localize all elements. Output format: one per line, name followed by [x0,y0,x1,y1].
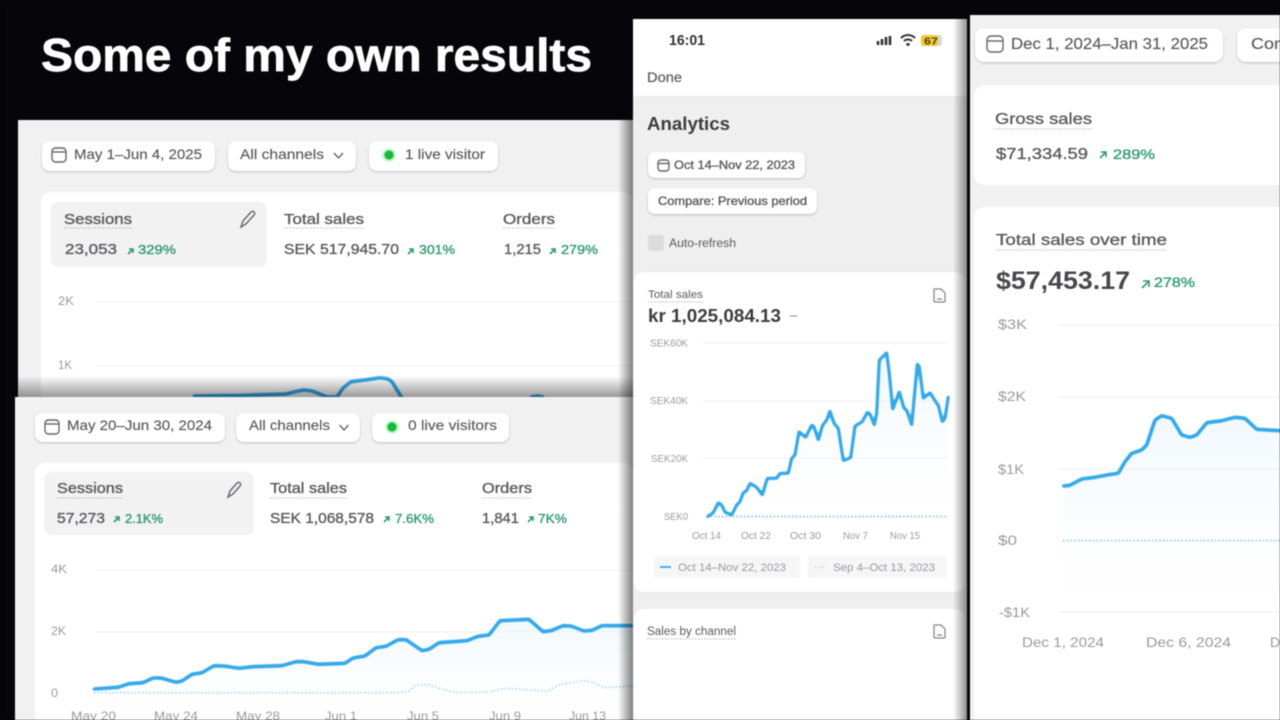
sales line chart [998,316,1280,650]
phone right edge shadow [953,19,967,720]
sessions metric [44,472,254,535]
card: total sales over time: Total sales over time [996,232,1167,249]
card: gross sales: 289% [1113,146,1155,162]
card: total sales over time [974,207,1280,720]
icon: wifi [901,35,915,45]
sessions line chart 2025 [58,294,632,398]
icon: battery [921,35,942,48]
card: total sales over time: $57,453.17 [996,267,1130,295]
card: total sales: Total sales [648,289,704,301]
total sales metric: 7.6K% [395,511,434,526]
compare chip: Compare: Previous period [658,194,807,208]
date filter chip 2024 [35,413,225,442]
sales line chart: $3K [998,316,1028,332]
sessions line chart 2024: 4K [51,562,67,576]
total sales line chart: SEK40K [650,395,688,407]
auto-refresh checkbox [648,235,736,251]
total sales metric: Total sales [270,480,347,497]
total sales metric: SEK 1,068,578 [270,510,374,527]
panel: 2024 analytics dashboard [15,397,633,720]
orders metric: 1,841 [482,510,519,527]
right edge shadow [618,397,633,720]
card: total sales over time: 278% [1154,274,1195,290]
analytics heading: Analytics [647,114,730,134]
date chip [648,152,805,178]
orders metric [503,211,598,258]
bottom edge shadow [18,376,633,398]
live visitors chip [372,413,509,442]
orders metric: Orders [482,480,532,497]
sessions metric: Sessions [64,211,132,228]
date chip: Oct 14–Nov 22, 2023 [674,158,795,172]
orders metric: Orders [503,211,555,228]
chart legend [654,556,947,578]
total sales line chart: Nov 7 [843,530,868,542]
live visitors chip: 0 live visitors [408,417,497,433]
icon: signal [878,36,890,45]
total sales metric: 301% [419,242,455,257]
panel: 2025 analytics dashboard [18,120,633,402]
live visitor chip: 1 live visitor [405,146,485,162]
compare chip, cropped [1237,28,1280,62]
card: sales by channel: Sales by channel [647,626,736,638]
total sales line chart: Oct 30 [790,530,821,542]
sessions metric: Sessions [57,480,123,497]
metrics and chart card [35,463,633,720]
sessions metric [51,202,267,267]
total sales metric: SEK 517,945.70 [284,241,399,258]
sales line chart: Dec 6, 2024 [1146,634,1231,650]
orders metric: 1,215 [504,241,541,258]
orders metric [482,480,567,527]
total sales line chart [650,338,948,542]
sessions line chart 2024 [51,562,632,720]
sessions line chart 2025: 1K [58,358,72,372]
phone status bar and header [633,19,967,96]
sessions line chart 2025: 2K [58,294,74,308]
sessions metric: 57,273 [57,510,105,527]
icon: export document [934,625,945,638]
total sales metric: Total sales [284,211,364,228]
chart legend: Sep 4–Oct 13, 2023 [833,562,935,574]
channel filter chip: All channels [249,417,330,433]
total sales metric [284,211,455,258]
total sales metric [270,480,434,527]
card: gross sales: $71,334.59 [996,146,1088,163]
total sales line chart: Oct 14 [692,530,721,542]
card: total sales [634,272,965,592]
sales line chart: D [1270,634,1280,650]
total sales line chart: SEK20K [651,453,688,465]
phone status bar and header: Done [647,69,682,85]
total sales line chart: Oct 22 [741,530,771,542]
channel filter chip: All channels [240,146,324,162]
card: gross sales [974,85,1280,185]
sessions metric: 23,053 [65,241,117,258]
sessions metric: 329% [138,242,177,257]
icon: export document [934,289,945,302]
phone status bar and header: 16:01 [669,32,705,49]
card: sales by channel [634,609,965,720]
total sales line chart: Nov 15 [890,530,920,542]
right edge shadow [618,120,633,400]
compare chip [648,188,817,214]
card: gross sales: Gross sales [995,111,1092,128]
date filter chip [975,28,1223,62]
orders metric: 7K% [538,511,567,526]
total sales line chart: SEK0 [664,511,688,523]
panel: gross sales dashboard [970,15,1280,720]
channel filter chip [228,141,356,171]
date filter chip 2024: May 20–Jun 30, 2024 [67,417,212,433]
total sales line chart: SEK60K [650,338,688,350]
title: Some of my own results [41,29,592,81]
date filter chip 2025: May 1–Jun 4, 2025 [74,146,202,162]
metrics and chart card [41,192,633,402]
sales line chart: Dec 1, 2024 [1022,634,1104,650]
sessions metric: 2.1K% [125,511,163,526]
sessions line chart 2024: 2K [51,624,66,638]
sales line chart: $2K [998,388,1027,404]
chart legend: Oct 14–Nov 22, 2023 [678,562,786,574]
sales line chart: $0 [998,532,1017,548]
icon: battery: 67 [924,36,939,48]
sales line chart: -$1K [999,604,1031,620]
panel: phone analytics screen [633,19,967,720]
sessions line chart 2024: 0 [51,686,58,700]
auto-refresh checkbox: Auto-refresh [669,238,736,250]
orders metric: 279% [561,242,598,257]
date filter chip 2025 [42,141,215,171]
sales line chart: $1K [998,461,1025,477]
channel filter chip [236,413,360,442]
card: total sales: kr 1,025,084.13 [648,306,781,326]
live visitor chip [369,141,498,171]
date filter chip: Dec 1, 2024–Jan 31, 2025 [1011,36,1208,53]
